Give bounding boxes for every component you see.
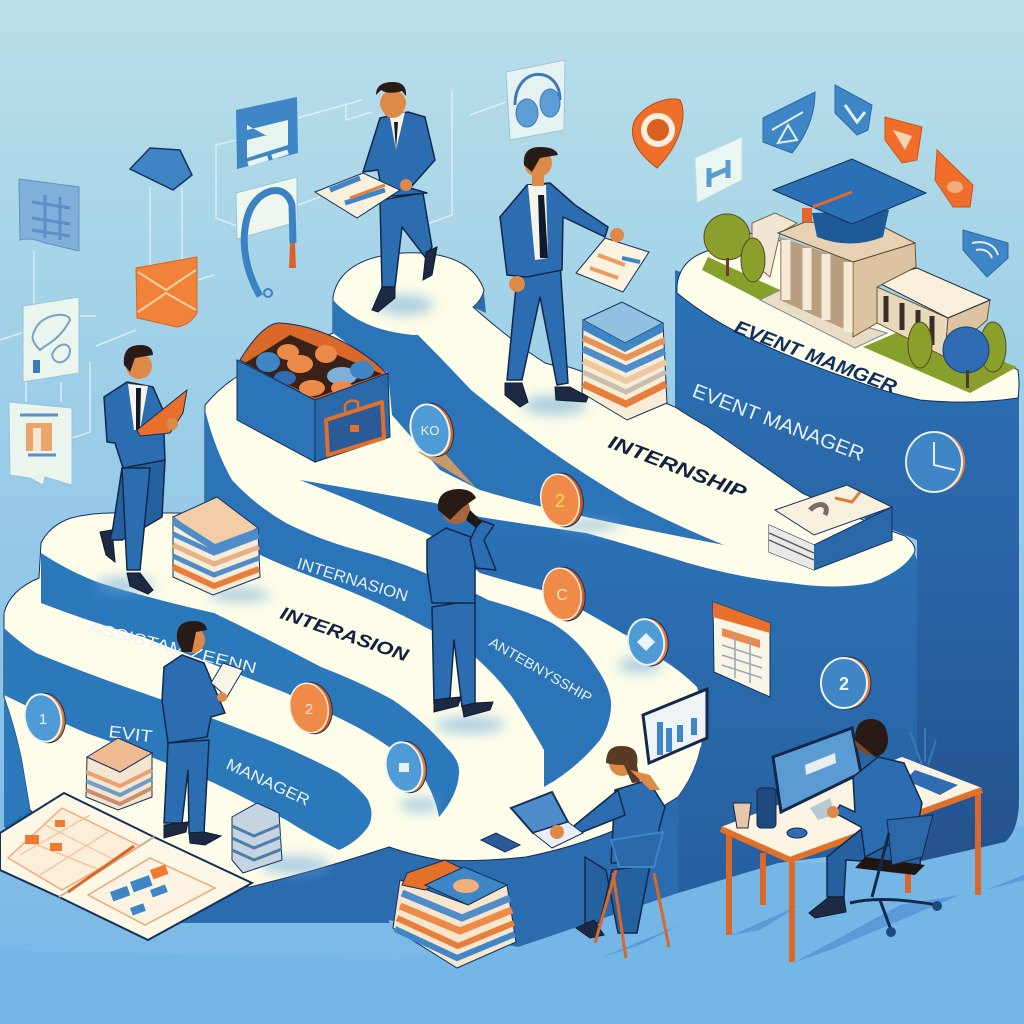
icon: book stack mid	[173, 497, 260, 595]
pen	[68, 846, 134, 892]
person: thinking	[427, 489, 496, 717]
icon: orange coin 2	[537, 470, 587, 530]
icon: orange coin left	[285, 678, 337, 738]
icon: blue coin 2: 2	[839, 674, 849, 694]
icon: hook card	[236, 177, 297, 297]
icon: blue document	[236, 97, 298, 169]
icon: orange coin c	[539, 564, 589, 624]
icon: headphones card	[506, 60, 565, 140]
back wing	[752, 213, 797, 277]
floor	[0, 825, 1024, 1024]
notebook and plant	[905, 770, 958, 795]
stage: assistant band	[41, 553, 459, 817]
icon: envelope	[136, 257, 197, 327]
icon: graduation cap small	[130, 148, 192, 190]
stage labels and coins	[20, 399, 871, 810]
icon: calendar	[713, 602, 770, 697]
stage: right cylinder with campus	[675, 230, 1019, 862]
icon: blue shield	[763, 92, 815, 153]
icon: open notebook	[0, 793, 252, 940]
connector lines	[0, 91, 506, 438]
person legs	[827, 830, 922, 897]
desk top	[721, 757, 982, 858]
icon: data panel	[19, 179, 79, 251]
stage: left wedge	[4, 697, 30, 827]
floating icons	[9, 60, 1008, 485]
stage: internasion band	[205, 410, 611, 787]
icon: blue coin 2	[821, 657, 871, 709]
icon: orange coin left: 2	[305, 701, 313, 718]
icon: orange pin	[632, 99, 683, 168]
person: with laptop	[100, 345, 187, 594]
label: event manager top: EVENT MAMGER	[731, 317, 900, 398]
icon: coin ko: KO	[421, 423, 439, 438]
speaker	[757, 788, 776, 828]
cap	[812, 210, 889, 244]
icon: wifi shield	[963, 230, 1008, 277]
icon: clock	[906, 432, 965, 492]
monitor	[773, 728, 861, 812]
icon: book on right	[769, 485, 892, 570]
briefcase emblem	[326, 401, 384, 455]
label: internship: INTERNSHIP	[605, 432, 749, 504]
icon: book stack bottom	[393, 860, 516, 968]
icon: coin ko	[405, 399, 459, 461]
stage: staircase walls	[4, 297, 917, 947]
label: event manager side: EVENT MANAGER	[689, 380, 867, 466]
label: evit: EVIT	[108, 722, 154, 746]
person: second with paper	[500, 147, 649, 407]
icon: orange leaf	[935, 150, 973, 207]
lawn	[702, 257, 1017, 393]
label: antebnysship: ANTEBNYSSHIP	[486, 634, 595, 706]
right page grid	[88, 858, 215, 925]
icon: chart card	[643, 689, 707, 763]
desk with person	[721, 719, 982, 962]
stage: manager band	[4, 628, 372, 850]
label: interasion: INTERASION	[278, 603, 412, 666]
right wing	[877, 287, 948, 357]
icon: left coin	[20, 690, 70, 746]
shadow under coin	[418, 448, 475, 487]
icon: small book stack	[232, 803, 282, 873]
chair	[850, 815, 942, 937]
label: internasion: INTERNASION	[295, 556, 410, 605]
icon: building card	[9, 402, 72, 485]
label: manager: MANAGER	[223, 756, 312, 810]
left page grid	[8, 808, 140, 890]
central building	[853, 243, 916, 337]
phone	[481, 833, 520, 852]
stage: blue nub beside top disc	[473, 293, 486, 313]
cup	[733, 803, 751, 828]
icon: map card	[23, 297, 79, 382]
icon: university building with cap	[704, 159, 1006, 388]
icon: book stack top	[582, 302, 667, 420]
icon: lock coin	[381, 738, 431, 796]
icon: letter card	[695, 137, 742, 203]
stage: blue wedge	[333, 300, 724, 545]
soft contact shadows	[95, 295, 662, 874]
icon: orange badge	[885, 117, 922, 163]
icon: blue coin star	[624, 615, 672, 669]
base	[760, 290, 887, 348]
person torso	[835, 757, 922, 857]
icon: orange coin c: C	[556, 587, 568, 604]
desk legs	[729, 793, 978, 962]
chair	[595, 832, 669, 958]
mouse	[787, 828, 807, 838]
person: top with book	[315, 82, 437, 312]
icon: book stack low-left	[86, 738, 152, 810]
stage: cream top surface	[4, 253, 915, 887]
hand	[827, 806, 839, 818]
person: reading lower left	[162, 621, 243, 845]
icon: blue tag	[835, 85, 872, 135]
stage: wall below internship	[300, 480, 917, 893]
laptop	[511, 792, 583, 848]
trees	[704, 214, 750, 260]
icon: open briefcase box	[237, 323, 390, 462]
icon: orange coin 2: 2	[555, 491, 565, 511]
icon: left coin: 1	[39, 711, 47, 728]
label: assistant: ASSISTAM ZEENN	[87, 619, 258, 677]
person: at laptop	[481, 746, 669, 958]
